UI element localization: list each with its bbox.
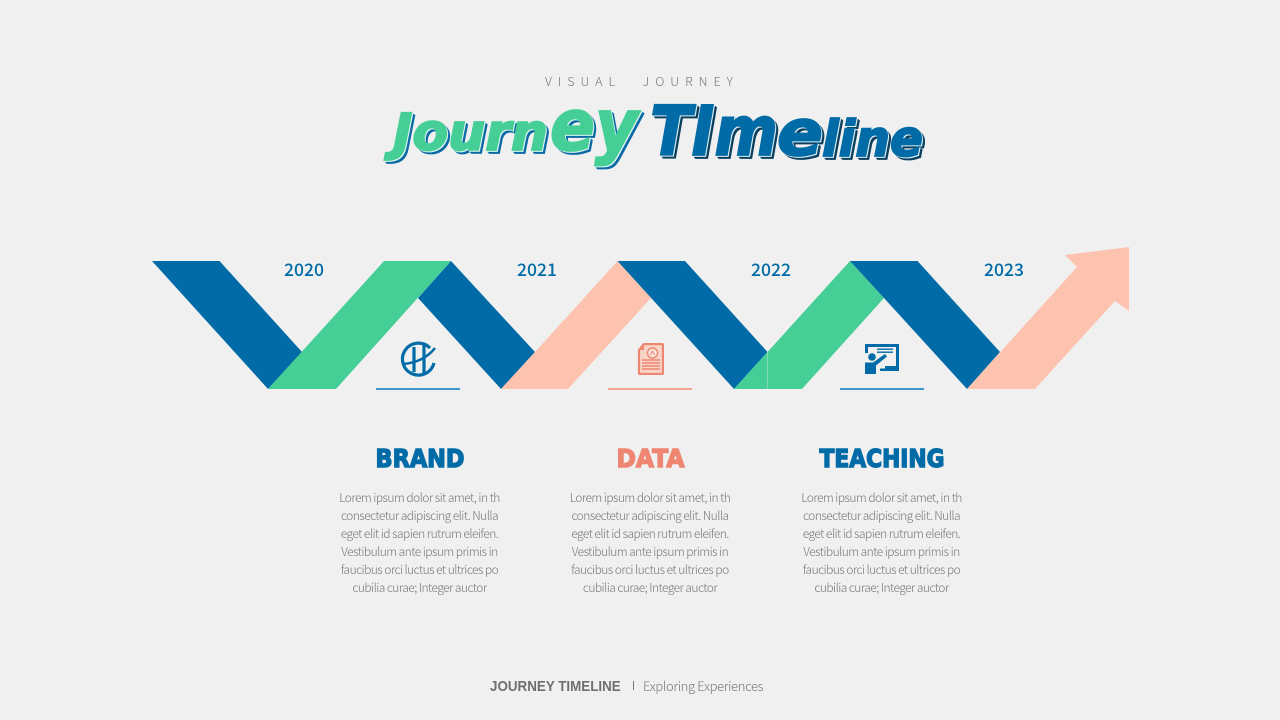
text block: teaching: consectetur adipiscing elit. Nulla [803,507,960,524]
title word: TIMEline: e [777,97,823,171]
text block: brand: cubilia curae; Integer auctor [352,579,487,596]
year 2021: 2021 [517,257,557,282]
footer [490,676,763,695]
text block: data: eget elit id sapien rutrum eleifen. [571,525,729,542]
text block: brand: eget elit id sapien rutrum eleifen. [341,525,498,542]
ribbon segment: blue 1 [152,261,302,389]
title word: TIMEline: TIm [650,92,778,172]
text block: teaching: faucibus orci luctus et ultrices po [803,561,960,578]
ribbon segment: green 1 [268,261,451,389]
title word: Journey: Journ [384,104,548,163]
icon: teaching presenter [865,344,899,374]
ribbon segment: blue 3 [618,261,768,389]
text block: teaching: eget elit id sapien rutrum eleifen. [803,525,960,542]
year 2023: 2023 [984,257,1024,282]
title word: TIMEline [650,92,923,172]
ribbon segment: blue 4 [850,261,1000,389]
ribbon segment: blue 2 [418,261,535,389]
icon: data document [638,343,664,375]
underline: data [608,388,692,390]
text block: data: faucibus orci luctus et ultrices po [571,561,729,578]
footer title: JOURNEY TIMELINE [490,678,621,695]
title word: Journey: ey [550,84,641,167]
text block: brand: Vestibulum ante ipsum primis in [341,543,498,560]
title word: Journey [384,84,641,167]
text block: brand: consectetur adipiscing elit. Nulla [341,507,498,524]
text block: data [570,489,730,596]
text block: brand: Lorem ipsum dolor sit amet, in th [339,489,500,506]
underline: brand [376,388,460,390]
arrow: peach final segment [967,247,1129,389]
title word: TIMEline: line [822,110,923,168]
icon: brand globe chart [400,342,436,377]
text block: brand [339,489,500,596]
year 2020: 2020 [284,257,324,282]
text block: data: consectetur adipiscing elit. Nulla [572,507,728,524]
text block: teaching: Vestibulum ante ipsum primis in [803,543,960,560]
ribbon segment: green 2 [734,261,884,389]
year 2022: 2022 [751,257,791,282]
text block: data: Lorem ipsum dolor sit amet, in th [570,489,730,506]
text block: teaching: Lorem ipsum dolor sit amet, in th [801,489,962,506]
text block: data: Vestibulum ante ipsum primis in [572,543,728,560]
footer subtitle: Exploring Experiences [643,676,763,694]
eyebrow: visual journey: VISUAL JOURNEY [545,71,739,90]
heading: data: DATA [616,444,685,473]
text block: data: cubilia curae; Integer auctor [583,579,717,596]
text block: teaching [801,489,962,596]
ribbon segment: peach 1 [501,261,651,389]
ribbon seam [766,352,768,389]
title [383,84,925,172]
year labels [284,257,1024,282]
text block: teaching: cubilia curae; Integer auctor [814,579,949,596]
text block: brand: faucibus orci luctus et ultrices po [341,561,498,578]
footer divider [633,681,634,690]
heading: brand: BRAND [376,444,464,473]
underline: teaching [840,388,924,390]
heading: teaching: TEACHING [820,444,944,473]
